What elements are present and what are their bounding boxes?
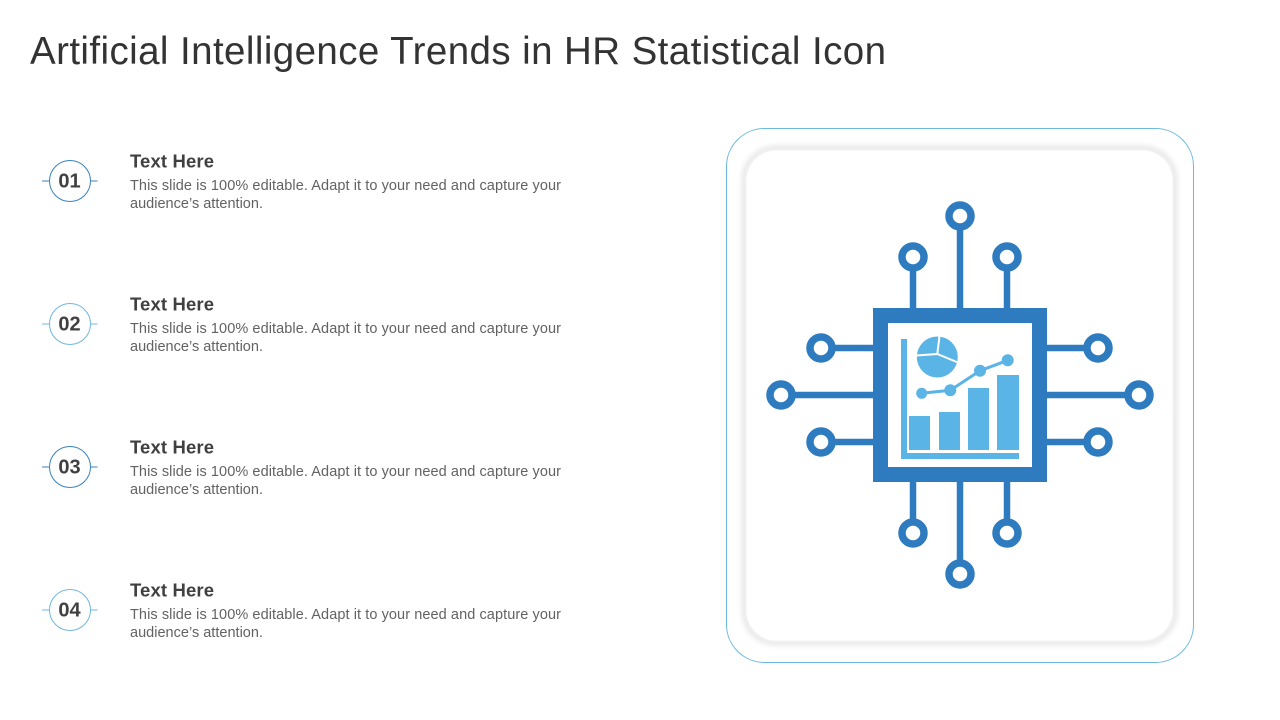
title: Artificial Intelligence Trends in HR Statistical Icon xyxy=(30,30,886,73)
text block 04: Text Here xyxy=(130,580,214,600)
number badge 01 xyxy=(42,160,98,202)
number badge 02 xyxy=(42,304,98,344)
icon: AI chip with statistics xyxy=(770,205,1150,585)
number badge 01: 01 xyxy=(58,170,81,192)
pie chart xyxy=(916,336,958,378)
number badge 02: 02 xyxy=(58,314,81,336)
text block 01: audience’s attention. xyxy=(130,196,263,212)
text block 03 xyxy=(130,436,561,498)
list item 02 xyxy=(42,294,561,355)
text block 02: audience’s attention. xyxy=(130,339,263,355)
text block 01: This slide is 100% editable. Adapt it to your need and capture your xyxy=(130,178,561,194)
text block 02: This slide is 100% editable. Adapt it to your need and capture your xyxy=(130,321,561,337)
chip connector lines xyxy=(781,216,1139,574)
chip connector nodes xyxy=(770,205,1150,585)
text block 04: This slide is 100% editable. Adapt it to your need and capture your xyxy=(130,607,561,623)
number badge 03 xyxy=(42,446,98,488)
list item 01 xyxy=(42,150,561,212)
text block 04: audience’s attention. xyxy=(130,625,263,641)
text block 03: Text Here xyxy=(130,436,214,458)
text block 01: Text Here xyxy=(130,150,214,172)
list item 03 xyxy=(42,436,561,498)
text block 02 xyxy=(130,294,561,355)
chart axes xyxy=(901,339,1019,459)
text block 03: audience’s attention. xyxy=(130,482,263,498)
number badge 04: 04 xyxy=(58,600,81,622)
text block 04 xyxy=(130,580,561,641)
chip body xyxy=(880,316,1040,474)
text block 02: Text Here xyxy=(130,294,214,314)
text block 01 xyxy=(130,150,561,212)
list item 04 xyxy=(42,580,561,641)
text block 03: This slide is 100% editable. Adapt it to your need and capture your xyxy=(130,464,561,480)
bar chart xyxy=(909,375,1019,450)
number badge 03: 03 xyxy=(58,456,81,478)
number badge 04 xyxy=(42,590,98,630)
panel: icon frame xyxy=(726,128,1194,662)
line chart xyxy=(916,354,1014,399)
